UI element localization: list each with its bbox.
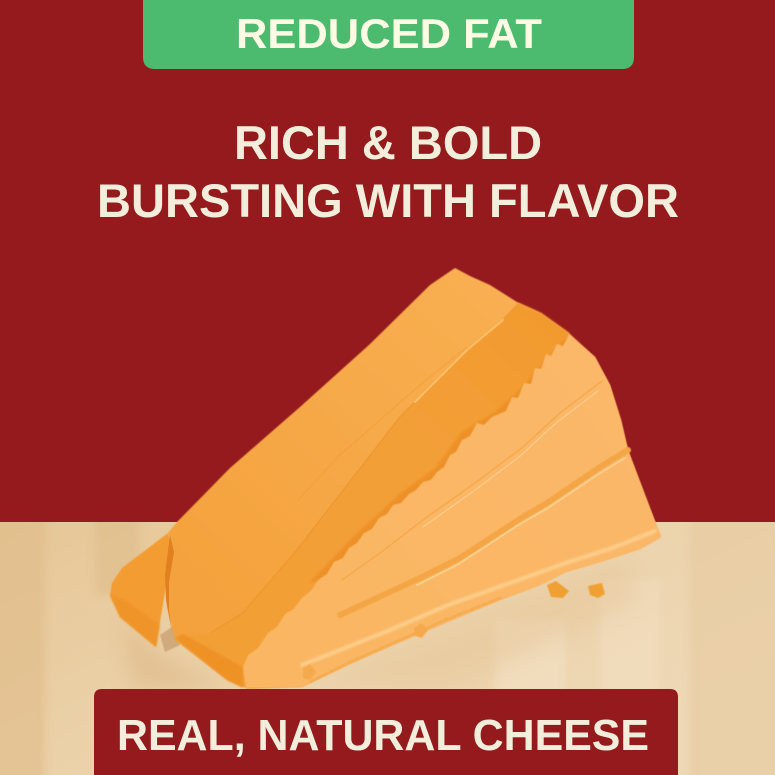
bright bottom edge xyxy=(302,531,655,665)
bottom-left side of wedge xyxy=(175,634,243,688)
upper groove on the light face xyxy=(342,381,602,580)
fine scratch xyxy=(298,347,467,500)
crack in the wedge xyxy=(165,535,174,632)
small broken wedge xyxy=(110,533,172,647)
wedge lower side shade xyxy=(110,594,160,647)
light lower face with torn edge xyxy=(243,335,661,688)
bottom banner: real, natural cheese xyxy=(94,689,678,775)
cut band of rind xyxy=(183,303,569,672)
green label: reduced fat xyxy=(143,0,634,69)
crack shadow on the board xyxy=(160,625,180,652)
small crumbs on the light face xyxy=(303,623,428,680)
headline: BURSTING WITH FLAVOR xyxy=(97,174,679,227)
cheese wedge xyxy=(110,268,661,689)
main cheese silhouette xyxy=(167,268,661,689)
headline xyxy=(97,116,679,227)
main groove in the top face xyxy=(212,305,518,632)
serration along the bottom xyxy=(310,598,500,682)
bottom banner: real, natural cheese: REAL, NATURAL CHEESE xyxy=(117,711,649,760)
surface details xyxy=(212,305,655,682)
wooden board xyxy=(0,515,775,775)
headline: RICH & BOLD xyxy=(234,116,542,169)
green label: reduced fat: REDUCED FAT xyxy=(236,10,542,57)
serrated ridge on the light face xyxy=(340,450,628,615)
deep orange shade along the tear xyxy=(310,335,569,582)
crumbs xyxy=(547,581,605,598)
